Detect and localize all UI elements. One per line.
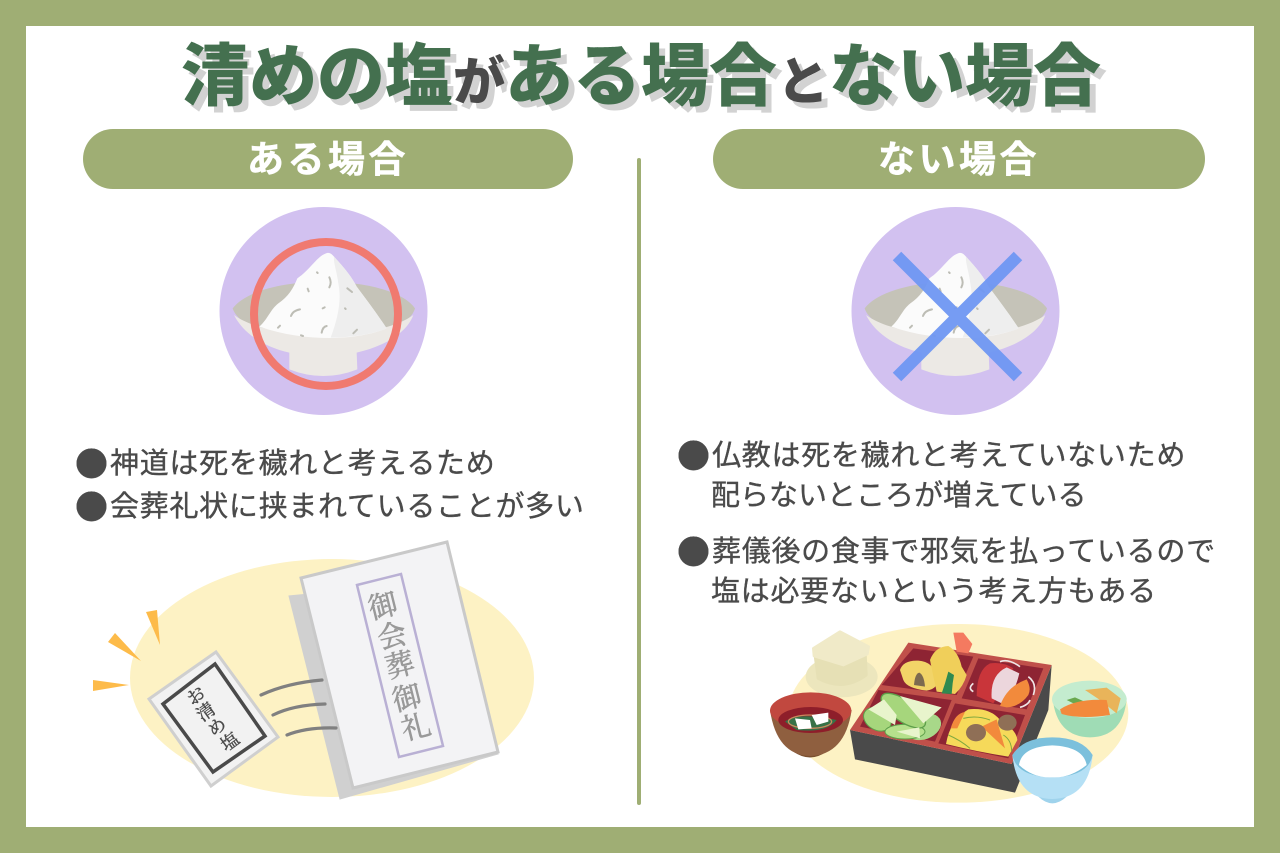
text: left bullet 2: ●	[75, 481, 108, 529]
invitation card: 御	[365, 587, 401, 626]
invitation card: 葬	[382, 646, 418, 685]
tempura	[953, 633, 972, 653]
invitation card: 御	[389, 679, 425, 718]
invitation card	[289, 542, 498, 799]
text: right bullet 2	[677, 526, 1216, 608]
salt packet: 清	[193, 699, 219, 725]
text: right bullet 1	[677, 430, 1186, 512]
text: left bullet 1: ●	[75, 438, 108, 486]
illustration: funeral meal	[770, 624, 1128, 803]
salt packet: 塩	[217, 729, 243, 755]
motion lines	[261, 680, 336, 735]
title: 清めの塩がある場合とない場合	[181, 39, 1101, 115]
salt packet: め	[204, 714, 230, 740]
text: right bullet 1: ●	[677, 430, 710, 478]
salt packet	[149, 652, 278, 786]
text: right bullet 2: 葬儀後の食事で邪気を払っているので	[712, 536, 1216, 568]
heading: right pill: ない場合	[878, 139, 1040, 180]
invitation card: 礼	[398, 708, 434, 747]
icon: salt with circle	[220, 207, 428, 415]
text: right bullet 1: 配らないところが増えている	[711, 480, 1087, 512]
bento box	[850, 633, 1052, 793]
tofu cup	[806, 632, 878, 697]
side dish bowl	[1052, 681, 1127, 737]
text: left bullet 1: 神道は死を穢れと考えるため	[110, 448, 496, 480]
icon: sparkle marks	[93, 610, 160, 691]
icon: salt with cross	[852, 207, 1060, 415]
text: right bullet 2: 塩は必要ないという考え方もある	[711, 576, 1157, 608]
divider	[637, 158, 641, 805]
text: left bullet 1	[75, 438, 496, 486]
sashimi	[977, 663, 1013, 703]
text: left bullet 2: 会葬礼状に挟まれていることが多い	[110, 491, 585, 523]
vegetables	[859, 703, 895, 736]
text: right bullet 1: 仏教は死を穢れと考えていないため	[712, 440, 1186, 472]
rice bowl	[1012, 737, 1093, 803]
text: left bullet 2	[75, 481, 585, 529]
heading: left pill	[83, 129, 573, 189]
heading: right pill	[713, 129, 1205, 189]
miso soup bowl	[770, 692, 852, 757]
simmered food	[946, 709, 1017, 757]
heading: left pill: ある場合	[247, 139, 409, 180]
invitation card: 会	[374, 617, 410, 656]
illustration: salt packet and funeral invitation	[93, 542, 534, 799]
text: right bullet 2: ●	[677, 526, 710, 574]
salt packet: お	[183, 683, 209, 709]
